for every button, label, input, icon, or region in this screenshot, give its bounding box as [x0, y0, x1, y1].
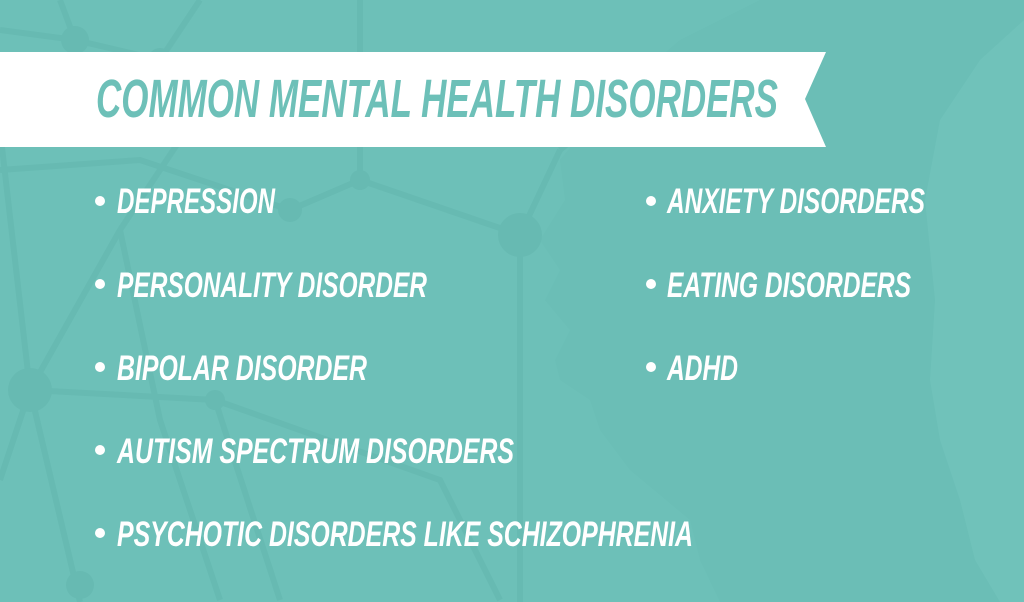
item: eating disorders: [646, 266, 911, 305]
item: autism spectrum disorders: AUTISM SPECTRUM DISORDERS: [116, 432, 514, 471]
list: right column: [646, 182, 925, 388]
item: bipolar disorder: [95, 349, 368, 388]
item: anxiety disorders: [646, 182, 925, 221]
item: bipolar disorder: BIPOLAR DISORDER: [117, 349, 368, 388]
item: personality disorder: PERSONALITY DISORDER: [117, 266, 428, 305]
item: autism spectrum disorders: [95, 432, 514, 471]
item: depression: [95, 182, 275, 221]
item: adhd: ADHD: [666, 349, 738, 388]
background: network lines: [0, 0, 620, 602]
item: psychotic disorders: [95, 515, 693, 554]
item: adhd: [646, 349, 738, 388]
item: depression: DEPRESSION: [117, 182, 275, 221]
item: eating disorders: EATING DISORDERS: [667, 266, 911, 305]
background: head silhouette: [540, 0, 1024, 602]
item: personality disorder: [95, 266, 428, 305]
list: left column: [95, 182, 693, 554]
item: psychotic disorders: PSYCHOTIC DISORDERS LIKE SCHIZOPHRENIA: [117, 515, 693, 554]
title banner: [0, 52, 826, 147]
